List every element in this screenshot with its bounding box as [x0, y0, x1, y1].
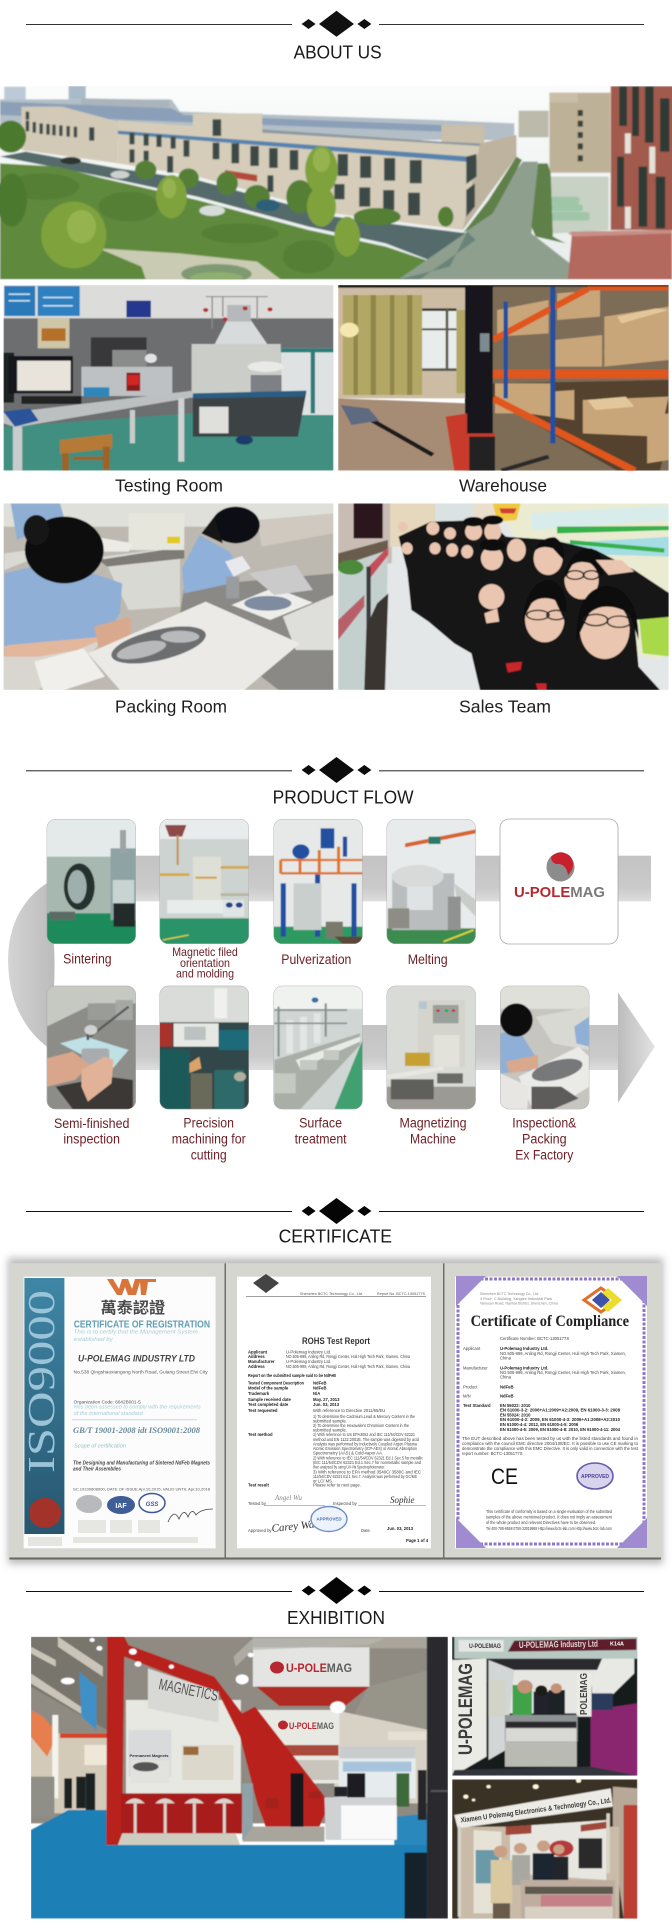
certificate: ROHS test report: U-Polemag Industry Ltd. [286, 1350, 331, 1354]
label: pulverization: Pulverization [281, 952, 351, 967]
label: semi-finished inspection: Semi-finished [54, 1116, 129, 1131]
certificate: certificate of compliance: EN 55024: 2010 [500, 1412, 531, 1418]
label: magnetic field orientation and molding: Magnetic filed [172, 945, 238, 959]
certificate: certificate of compliance: Test Standard [463, 1403, 491, 1408]
section header: exhibition [26, 1577, 644, 1628]
certificate: certificate of compliance: M/N [463, 1394, 471, 1398]
certificate: certificate of compliance: Tel 400-788-9558 0755-33019988 Http://www.bctc-lab.com Http://www.bctc-lab.com [486, 1526, 612, 1531]
certificate: ROHS test report: Sophie [390, 1495, 415, 1505]
section header: certificate [26, 1198, 644, 1247]
certificate: ROHS test report: 2) To determine the Hexavalent Chromium Content in the [313, 1423, 410, 1428]
decorative purple border [456, 1276, 647, 1548]
certificate: ROHS test report: Report No. BCTC-1305177S [377, 1292, 425, 1296]
certificate: ROHS test report: With reference to Directive 2011/65/EU [313, 1408, 385, 1413]
certificate: certificate of compliance: The EUT described above has been tested by us with the listed standards and found in [462, 1436, 639, 1441]
certificate: ISO9000 registration: of the international standard [74, 1411, 143, 1417]
certificate: ROHS test report: or LC/ MS. [313, 1478, 333, 1484]
certificate: ROHS test report: Jun. 03, 2013 [387, 1526, 414, 1531]
certificate: ROHS test report: 1) To determine the Cadmium,Lead & Mercury Content in the [313, 1414, 416, 1419]
certificate: ROHS test report: submitted sample. [313, 1428, 347, 1432]
certificate: ISO9000 registration: and Their Assemblies [73, 1466, 121, 1472]
label: precision machining for cutting: Precision [183, 1116, 234, 1130]
certificate: ROHS test report: ROHS Test Report [302, 1336, 370, 1346]
certificate: ROHS test report: May. 27, 2013 [313, 1397, 340, 1402]
caption: sales team: Sales Team [459, 696, 551, 716]
seals: IAF [115, 1503, 127, 1510]
label: inspection and packing, ex factory: Packing [522, 1132, 567, 1146]
certificate: ROHS test report: Test requested [248, 1408, 278, 1413]
flow step: pulverization [273, 819, 363, 967]
certificate: certificate of compliance: compliance with the council EMC directive 2004/108/EC. It is possible to use CE marking to [462, 1441, 639, 1446]
certificate: ROHS test report: Address [248, 1364, 265, 1369]
certificate: certificate of compliance: Shenzhen BCTC Technology Co., Ltd. [480, 1292, 539, 1296]
label: melting: Melting [408, 952, 448, 967]
photo: factory panorama [0, 80, 672, 287]
label: semi-finished inspection: inspection [63, 1132, 120, 1146]
certificate: certificate of compliance: demonstrate the compliance with this EMC Directive. It is only valid in connection with the test [462, 1446, 639, 1451]
logo: BCTC [253, 1274, 279, 1293]
flow arrow: grey band with return arc and arrowhead [8, 856, 655, 1103]
certificate: ROHS test report: N/A [313, 1391, 320, 1396]
certificate: ROHS test report: Carey Wang [271, 1517, 326, 1535]
certificate: ROHS test report: Test result [248, 1482, 269, 1488]
certificate: certificate of compliance: EN 61000-4-2: 2009, EN 61000-4-3: 2006+A1:2008+A2:2010 [500, 1417, 621, 1422]
certificate: certificate of compliance: samples of the above mentioned product. It does not imply an assessment [486, 1514, 613, 1520]
stamp: compliance: APPROVED [581, 1474, 609, 1480]
certificate: ROHS test report: Approved by [248, 1528, 272, 1533]
section: certificate [8, 1198, 663, 1564]
photo: testing room [3, 285, 333, 496]
stamp: compliance [577, 1463, 613, 1489]
certificate: certificate of compliance: EN 61000-4-6: 2009, EN 61000-4-8: 2010, EN 61000-4-11: 2004 [500, 1427, 621, 1432]
photo: main exhibition stand [31, 1637, 448, 1919]
section: about us [0, 11, 672, 716]
label: magnetizing machine: Machine [410, 1132, 456, 1146]
label: semi-finished inspection [54, 1116, 129, 1146]
certificate: ISO9000 registration: Has been assessed to comply with the requirements [74, 1404, 201, 1410]
certificate: ISO9000 registration: established by [74, 1337, 114, 1343]
certificate: ROHS test report: 2) With reference to IEC 111/54/CDV 62321 Ed.1 Sec.5 for metallic [313, 1456, 423, 1460]
certificate: ROHS test report: Atomic Emission Spectrometry (ICP-AES) or Atomic Absorption [313, 1446, 418, 1451]
banner text: Xiamen U Polemag Electronics & Technology Co., Ltd.: Xiamen U Polemag Electronics & Technology Co., Ltd. [460, 1795, 612, 1824]
label: inspection and packing, ex factory: Inspection& [512, 1116, 576, 1130]
vertical wall text left: U-POLEMAG [456, 1663, 477, 1755]
certificate: certificate of compliance [455, 1276, 647, 1548]
certificate: certificate of compliance: China [500, 1374, 512, 1380]
seals [29, 1494, 213, 1533]
certificate: ISO9000 registration: The Designing and Manufacturing of Sintered NdFeb Magnets [73, 1460, 210, 1466]
certificate: ROHS test report: Jun. 03, 2013 [313, 1402, 340, 1407]
certificate: ROHS test report: NdFeB [313, 1380, 326, 1386]
certificate: ROHS test report: Date [361, 1528, 371, 1533]
section header: product flow [26, 757, 644, 807]
caption: packing room: Packing Room [115, 696, 227, 716]
certificate: certificate of compliance: China [500, 1356, 512, 1360]
certificate: ROHS test report: Trademark [248, 1391, 270, 1396]
flow step: inspection and packing [500, 986, 589, 1162]
certificate: certificate of compliance: Certificate of Compliance [471, 1313, 629, 1330]
certificate: certificate of compliance: NdFeB [500, 1384, 514, 1390]
certificate: ROHS test report: Applicant [248, 1350, 268, 1354]
certificate: ROHS test report: U-Polemag Industry Ltd. [286, 1359, 331, 1364]
label: precision machining for cutting: cutting [191, 1148, 227, 1162]
sign: MAGNETICS: MAGNETICS [157, 1676, 219, 1705]
certificate: certificate of compliance: This certificate of conformity is based on a single evaluation of the submitted [486, 1509, 613, 1514]
label: precision machining for cutting: machining for [172, 1132, 246, 1146]
flow step: semi-finished inspection [47, 986, 136, 1146]
certificate: ROHS test report: Shenzhen BCTC Technology Co., Ltd. [300, 1292, 363, 1296]
stamp: approved: APPROVED [316, 1516, 342, 1522]
section header: exhibition: EXHIBITION [287, 1607, 385, 1628]
label: magnetizing machine [400, 1116, 466, 1146]
label: magnetizing machine: Magnetizing [400, 1116, 466, 1130]
vertical wall text right: POLEMAG [579, 1673, 590, 1715]
certificate: certificate of compliance: EN 55022: 2010 [500, 1403, 531, 1408]
certificate: ROHS test report: Please refer to next page. [313, 1482, 361, 1488]
label: surface treatment: treatment [295, 1132, 347, 1146]
certificate: certificate of compliance: Manufacturer [463, 1366, 488, 1370]
certificate: ISO9000 registration: GB/T 19001-2008 idt ISO9001:2008 [73, 1425, 201, 1435]
certificate: ROHS test report: Tested Component Description [248, 1380, 304, 1386]
section header: about us [26, 11, 644, 62]
section header: about us: ABOUT US [294, 41, 382, 62]
label: sintering: Sintering [63, 952, 112, 966]
banner text: U-POLEMAG Industry Ltd: U-POLEMAG Industry Ltd [519, 1639, 598, 1650]
certificate: certificate of compliance: Certificate Number: BCTC-1305177S [500, 1336, 569, 1341]
certificate: certificate of compliance: Vanyuan Road, Nanhai District, Shenzhen, China [480, 1302, 558, 1306]
certificate: ROHS test report: Model of the sample [248, 1386, 289, 1390]
certificate: certificate of compliance: NO.505-999, Anling Rd, Rongji Center, Huli High Tech Park, Xiamen, [500, 1351, 626, 1356]
certificate: certificate of compliance: U-Polemag Industry Ltd. [500, 1366, 548, 1370]
label: magnetic field orientation and molding [172, 945, 238, 980]
sign: U-POLEMAG upper: U-POLEMAG [286, 1661, 352, 1675]
certificate: ISO9000 registration: Scope of certification [74, 1444, 126, 1450]
certificate: ROHS test report: Manufacturer [248, 1359, 275, 1364]
flow step: magnetizing machine [387, 986, 476, 1146]
banner logo text: U-POLEMAG [469, 1644, 501, 1650]
flow step: surface treatment [273, 986, 363, 1146]
flow step: precision machining [159, 986, 249, 1162]
flow step: melting [387, 819, 476, 967]
certificate: ROHS test report: NO.505-999, Anling Rd, Rongji Center, Huli High Tech Park, Xiamen, China [286, 1364, 411, 1369]
CE mark: CE [491, 1464, 518, 1489]
stamp: approved [311, 1506, 347, 1532]
certificate frame [8, 1258, 663, 1564]
seals: GSS [146, 1502, 158, 1508]
certificate: ROHS test report: NdFeB [313, 1386, 326, 1390]
icon: logo mark [546, 852, 574, 882]
certificate: ISO9000 registration: CERTIFICATE OF REGISTRATION [74, 1320, 210, 1330]
certificate: ROHS test report: Inspected by [333, 1501, 358, 1506]
certificate: ROHS test report [237, 1274, 431, 1548]
certificate: ISO9000 registration: Organization Code: 6642B001-5 [74, 1400, 141, 1404]
certificate: ROHS test report: (IEC 111/54/CDV 62321 Ed.1 Sec.7 for nonmetallic sample and [313, 1460, 422, 1465]
sign: U-POLEMAG lower: U-POLEMAG [289, 1721, 334, 1732]
certificate: ROHS test report: NO.505-999, Anling Rd, Rongji Center, Huli High Tech Park, Xiamen, China [286, 1354, 411, 1359]
iso9000 vertical text: ISO9000 [21, 1290, 63, 1473]
label: precision machining for cutting [172, 1116, 246, 1162]
certificate: ROHS test report: then analyzed by using UV-Vis Spectrophotometer. [313, 1464, 385, 1470]
certificate: certificate of compliance: EN 61000-3-2: 2006+A1:2009+A2:2009, EN 61000-3-3: 2008 [500, 1408, 621, 1412]
certificate: ROHS test report: method and EN 1122:2001B. The sample was digested by acid [313, 1437, 420, 1442]
certificate: ROHS test report: 1) With reference to US EPA3052 and IEC 111/54/CDV 62321 [313, 1432, 416, 1437]
logo text: U-POLEMAG [514, 884, 605, 901]
certificate: ISO9000 registration [21, 1277, 216, 1548]
logo: BCTC colored diamond [584, 1288, 622, 1312]
section header: certificate: CERTIFICATE [279, 1226, 392, 1247]
label: magnetic field orientation and molding: orientation [180, 956, 230, 970]
certificate: ROHS test report: Test completed date [248, 1402, 289, 1407]
certificate: certificate of compliance: NdFeB [500, 1394, 514, 1398]
certificate: certificate of compliance: U-Polemag Industry Ltd. [500, 1346, 548, 1351]
certificate: ROHS test report: 3) With reference to EPA method 3540C/ 3580C and IEC [313, 1470, 421, 1474]
certificate: certificate of compliance: Product [463, 1384, 478, 1390]
certificate: ROHS test report: Spectrometry (AAS) & Cold-vapor AA. [313, 1450, 383, 1456]
certificate: ROHS test report: Address [248, 1354, 265, 1359]
certificate: certificate of compliance: EN 61000-4-4: 2012, EN 61000-4-5: 2006 [500, 1422, 579, 1427]
flow step: magnetic field orientation [159, 819, 249, 980]
certificate: certificate of compliance: NO.505-999, Anling Rd, Rongji Center, Huli High Tech Park, Xiamen, [500, 1370, 626, 1375]
certificate: ROHS test report: Report on the submitted sample said to be NdFeB [248, 1373, 336, 1378]
label: magnetic field orientation and molding: and molding [176, 966, 234, 980]
caption: warehouse: Warehouse [459, 476, 547, 496]
photo: sales team [338, 503, 672, 716]
logo: WIT [107, 1279, 156, 1295]
certificate: ROHS test report: submitted sample. [313, 1418, 347, 1424]
label: inspection and packing, ex factory [512, 1116, 576, 1162]
poster text: permanent magnets: Permanent Magnets [130, 1753, 169, 1758]
photo: packing room [3, 503, 333, 716]
certificate: certificate of compliance: of the whole product and relevant Directives have to be observed. [486, 1520, 596, 1525]
certificate: ROHS test report: Analysis was performed by Inductively Coupled Argon Plasma [313, 1442, 418, 1446]
certificate: ROHS test report: Sample received date [248, 1397, 291, 1402]
photo: warehouse [338, 285, 672, 496]
certificate: certificate of compliance: report number: BCTC-1305177S [462, 1451, 523, 1456]
section header: product flow: PRODUCT FLOW [273, 786, 414, 807]
certificate: ROHS test report: 111/54/CDV 62321 Ed.1 Sec.7. Analysis was performed by GC/MS [313, 1474, 417, 1479]
certificate: ISO9000 registration: U-POLEMAG INDUSTRY LTD [78, 1354, 195, 1364]
certificate: ROHS test report: Angel Wu [274, 1494, 303, 1502]
certificate: ROHS test report: Tested by [248, 1501, 267, 1506]
certificate: ISO9000 registration: This is to certify that the Management System [74, 1330, 198, 1336]
certificate: certificate of compliance: 4 Floor, C Building, Yangtze Industrial Park [480, 1297, 552, 1301]
photo: exhibition booth with white banner [452, 1779, 637, 1919]
certificate: certificate of compliance: Applicant [463, 1346, 481, 1351]
flow step: sintering [47, 819, 136, 966]
certificate: ROHS test report: Page 1 of 4 [406, 1538, 429, 1543]
photo: exhibition booth with purple carpet [452, 1637, 637, 1776]
certificate: ISO9000 registration: 萬泰認證 [101, 1298, 166, 1317]
label: inspection and packing, ex factory: Ex Factory [515, 1148, 574, 1162]
section: exhibition [26, 1577, 644, 1919]
section: product flow [8, 757, 655, 1162]
label: surface treatment: Surface [299, 1116, 342, 1130]
certificate: ISO9000 registration: No.538 Qingshaoxiangong North Road, Guiang Street Elvi City [74, 1370, 208, 1376]
certificate: ISO9000 registration: SC.19100808000, DATE OF ISSUE Apr.10,2015, VALID UNTIL Apr.10,2018 [73, 1488, 210, 1492]
booth number: K14A [610, 1642, 624, 1648]
certificate: ROHS test report: Test method [248, 1432, 273, 1437]
caption: testing room: Testing Room [115, 476, 223, 496]
label: surface treatment [295, 1116, 347, 1146]
logo card: U-POLEMAG [500, 819, 618, 944]
